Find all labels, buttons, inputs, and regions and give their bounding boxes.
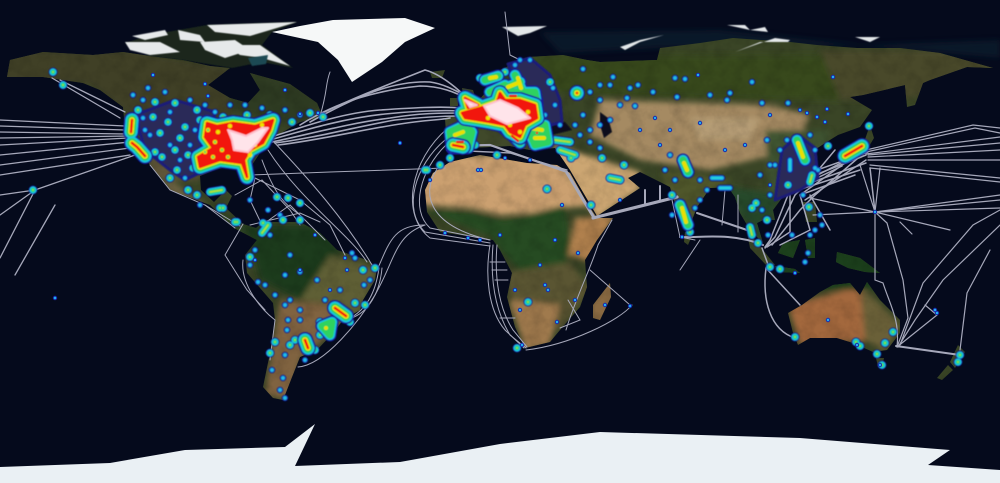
snow on arctic islands	[125, 22, 297, 66]
foxe basin tint	[248, 55, 268, 66]
cyan low density blobs	[133, 60, 822, 398]
caribbean cables	[150, 165, 345, 360]
high density zones	[131, 93, 862, 348]
canadian arctic islands	[125, 22, 297, 68]
antarctica	[0, 424, 1000, 483]
pacific east cables	[810, 125, 1000, 350]
warm density zones	[322, 75, 805, 335]
patchy interior detail	[205, 96, 537, 157]
red patches in warm areas	[457, 96, 537, 142]
east asia cable bundle	[762, 150, 875, 338]
indian ocean and red sea cables	[447, 120, 763, 270]
land colour variation	[0, 50, 1000, 400]
shallow arctic sea tint	[540, 30, 1000, 58]
transatlantic cable bundle	[268, 70, 472, 145]
submarine cables	[0, 12, 1000, 367]
medium density blobs	[33, 72, 960, 365]
tasman cable bundle	[896, 346, 960, 355]
base land	[7, 38, 993, 400]
pacific west cables	[0, 78, 135, 275]
greenland	[272, 18, 435, 82]
land texture	[154, 46, 938, 388]
atlantic cables	[250, 12, 520, 367]
warm zone yellow specks	[326, 77, 803, 328]
scattered city dots	[55, 75, 937, 365]
internet density heat map	[33, 58, 960, 398]
west african cables	[378, 128, 632, 350]
svalbard and arctic russia ice	[502, 25, 880, 52]
low density purple zones	[135, 58, 818, 200]
peak density white cores	[228, 100, 530, 152]
caspian and black seas	[540, 112, 612, 138]
